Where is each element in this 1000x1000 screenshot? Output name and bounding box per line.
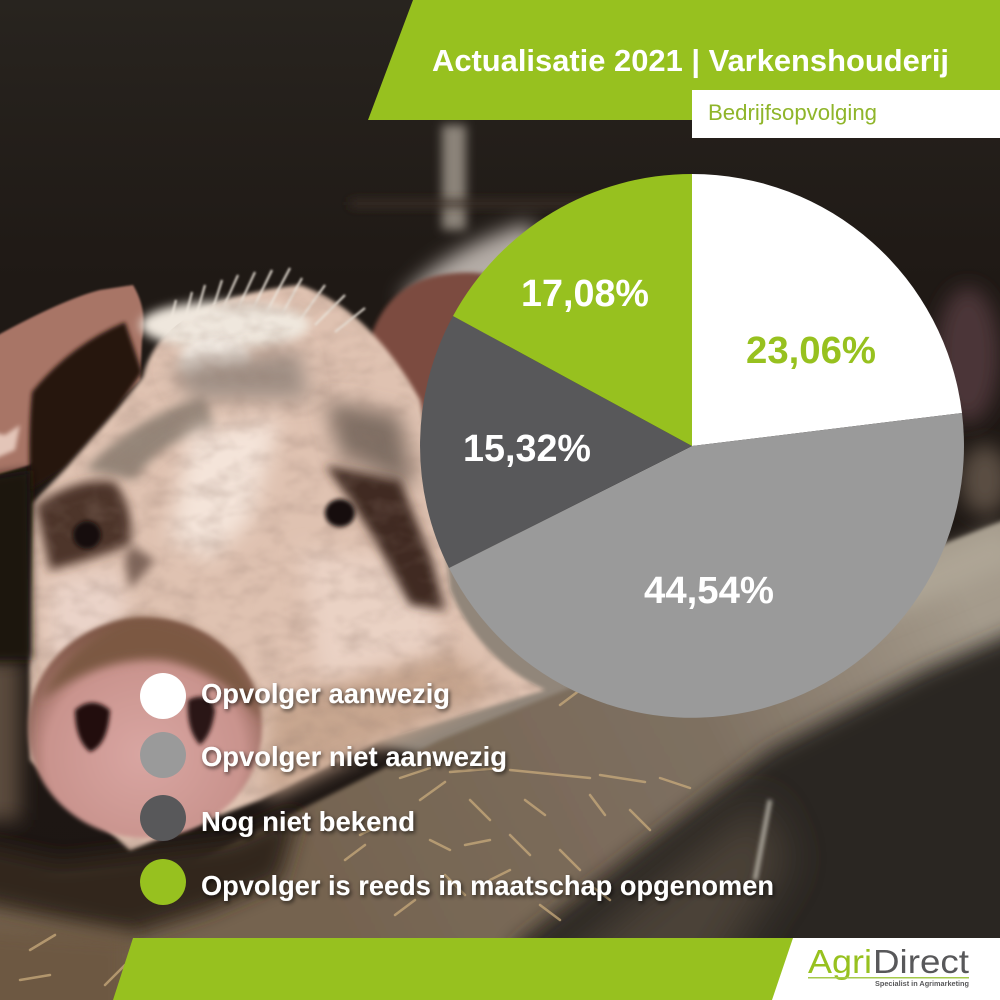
- mottled fur texture: [32, 291, 536, 847]
- forehead highlights: [140, 301, 310, 349]
- white logo area: [772, 938, 1000, 1000]
- legend label: opvolger aanwezig: Opvolger aanwezig: [201, 678, 450, 709]
- value 17,08%: 17,08%: [521, 273, 649, 315]
- subtitle box: [692, 90, 1000, 138]
- legend dot: dark grey: [140, 795, 186, 841]
- legend label: opvolger in maatschap: Opvolger is reeds in maatschap opgenomen: [201, 870, 774, 901]
- slice: opvolger opgenomen 17,08%: [453, 174, 692, 446]
- value 15,32%: 15,32%: [463, 428, 591, 470]
- slice: opvolger aanwezig 23,06%: [692, 174, 962, 446]
- logo: AgriDirect: Agri: [808, 943, 872, 980]
- legend label: opvolger niet aanwezig: Opvolger niet aanwezig: [201, 741, 507, 772]
- snout: [28, 618, 262, 838]
- value 23,06%: 23,06%: [746, 330, 876, 372]
- legend dot: green: [140, 859, 186, 905]
- shadow under snout: [0, 810, 300, 935]
- pig body: [360, 480, 590, 760]
- header banner: [368, 0, 1000, 138]
- logo: AgriDirect: Direct: [873, 943, 969, 980]
- footer band: [113, 938, 1000, 1000]
- left ear pale underside: [0, 425, 20, 465]
- subtitle: Bedrijfsopvolging: [708, 100, 877, 125]
- trough surface: [0, 510, 1000, 1000]
- hair tufts on forehead: [170, 268, 365, 332]
- legend: [140, 673, 774, 905]
- slice: nog niet bekend 15,32%: [420, 316, 692, 568]
- logo: AgriDirect: [808, 943, 969, 988]
- central blaze: [170, 420, 280, 560]
- right background animal: [936, 287, 1000, 423]
- pig right ear: [368, 272, 490, 420]
- dark left of face: [0, 470, 32, 660]
- pie chart: [420, 174, 964, 718]
- whisker side: [0, 660, 20, 820]
- face base: [29, 285, 545, 850]
- left ear inner shadow: [29, 322, 142, 490]
- dark trough interior: [490, 625, 1000, 1000]
- straw pieces: [20, 690, 690, 985]
- pig left ear: [0, 285, 144, 480]
- eyes: [73, 521, 101, 549]
- title: Actualisatie 2021 | Varkenshouderij: [432, 43, 949, 78]
- logo: AgriDirect: Specialist in Agrimarketing: [875, 981, 969, 988]
- eye patches: [36, 481, 131, 570]
- pig back behind the ear: [400, 222, 560, 340]
- value 44,54%: 44,54%: [644, 570, 774, 612]
- nostrils: [75, 702, 110, 752]
- grey hair bands: [85, 395, 215, 480]
- slice: opvolger niet aanwezig 44,54%: [449, 413, 964, 718]
- green footer shape: [113, 938, 800, 1000]
- legend label: nog niet bekend: Nog niet bekend: [201, 806, 415, 837]
- jaw shading: [265, 650, 500, 800]
- light trough rim: [700, 545, 1000, 665]
- green banner shape: [368, 0, 1000, 120]
- legend dot: white: [140, 673, 186, 719]
- bottom-left straw corner: [0, 925, 130, 1000]
- legend dot: grey: [140, 732, 186, 778]
